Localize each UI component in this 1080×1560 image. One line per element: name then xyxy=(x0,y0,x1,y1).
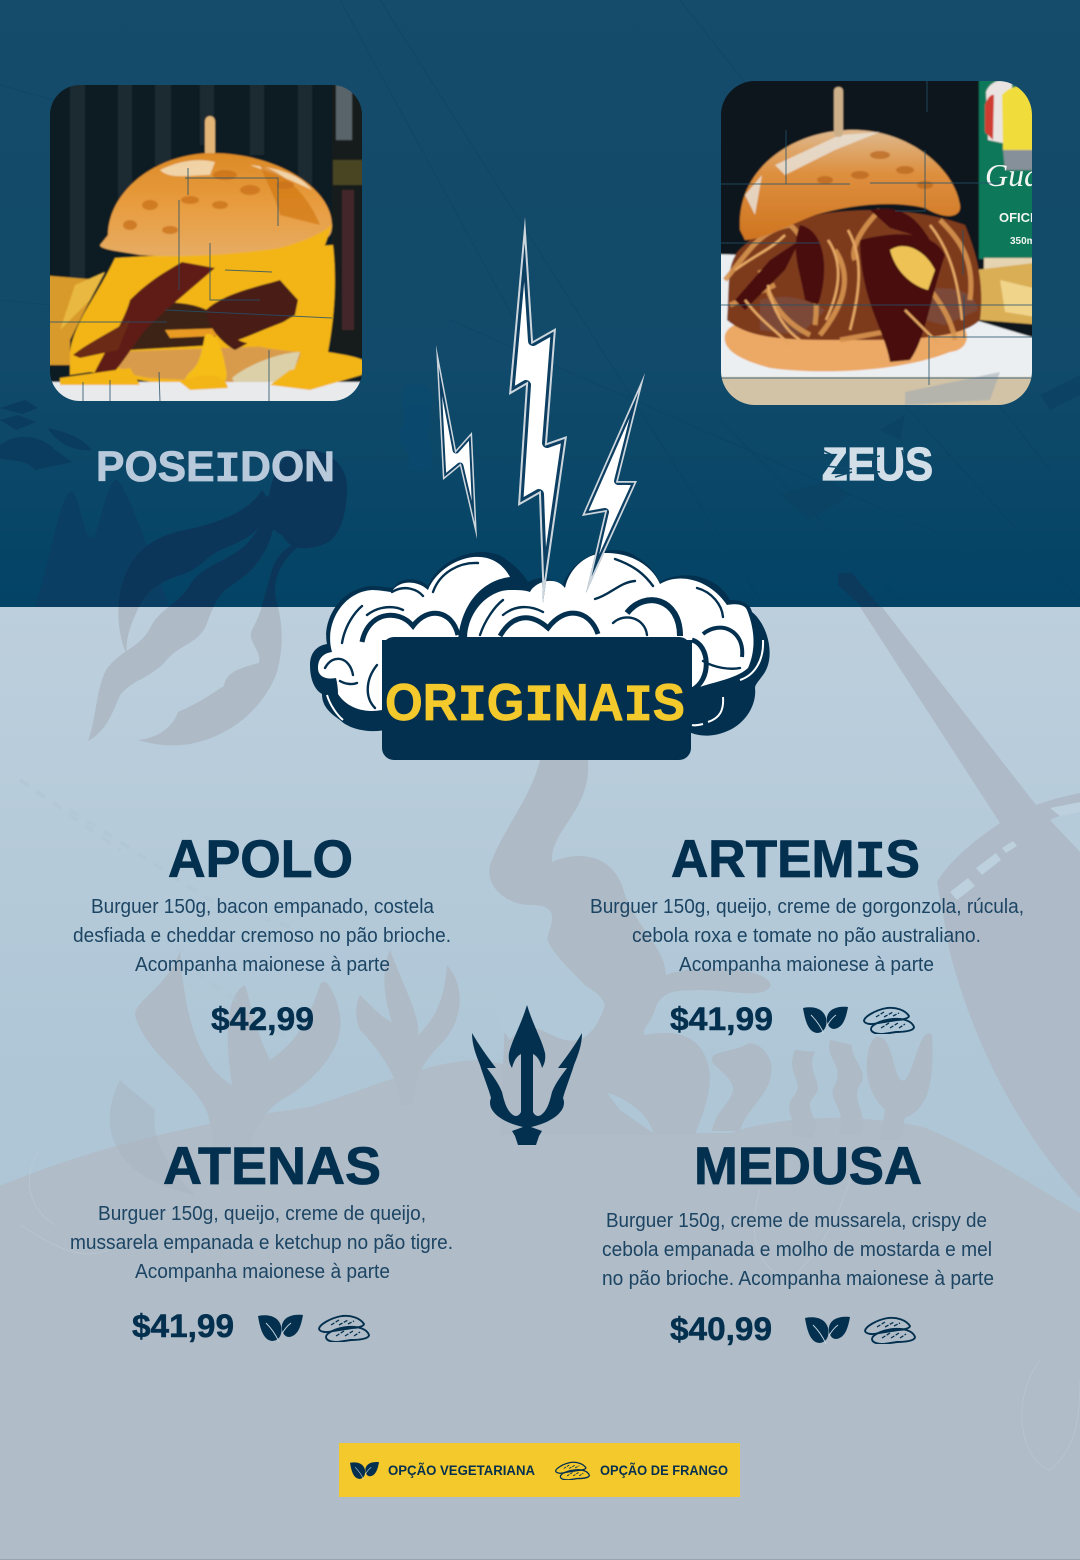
item: Medusa: cebola empanada e molho de mostarda e mel xyxy=(602,1239,992,1261)
cloud outline xyxy=(310,550,770,736)
cloud inner strokes xyxy=(362,613,458,642)
banner: Originais xyxy=(382,637,691,760)
item: Atenas: ATENAS xyxy=(163,1137,381,1196)
label: Zeus: ZEUS xyxy=(822,438,933,490)
icon: chicken legend xyxy=(556,1462,589,1480)
photo: Poseidon burger xyxy=(50,85,362,401)
item: Artemis xyxy=(590,830,1024,1037)
legend: OPÇÃO DE FRANGO xyxy=(600,1463,728,1478)
item: Apolo: APOLO xyxy=(168,830,353,889)
bolt: left xyxy=(436,345,477,539)
item: Medusa: $40,99 xyxy=(670,1311,772,1347)
bottle label: 350m xyxy=(1010,236,1036,247)
banner: Originais: ORIGINAIS xyxy=(385,674,685,736)
legend xyxy=(339,1443,740,1497)
bottle label: Guar xyxy=(985,157,1053,193)
item: Medusa: no pão brioche. Acompanha maionese à parte xyxy=(602,1268,994,1290)
item: Artemis: $41,99 xyxy=(670,1001,773,1037)
legend: OPÇÃO VEGETARIANA xyxy=(388,1463,535,1478)
item: Atenas xyxy=(70,1137,453,1344)
lightning bolts xyxy=(436,217,645,603)
background: jellyfish silhouette xyxy=(88,449,347,745)
item: Atenas: $41,99 xyxy=(132,1308,234,1344)
bottle label xyxy=(986,165,1032,244)
item: Medusa: Burguer 150g, creme de mussarela, crispy de xyxy=(606,1210,987,1232)
item: Apolo: Acompanha maionese à parte xyxy=(135,954,390,976)
icon: leaf xyxy=(805,1317,850,1344)
icon: chicken xyxy=(865,1318,915,1344)
item: Artemis: cebola roxa e tomate no pão australiano. xyxy=(632,925,981,947)
item: Artemis: ARTEMIS xyxy=(671,830,920,893)
item: Apolo: Burguer 150g, bacon empanado, costela xyxy=(91,896,435,918)
item: Medusa: MEDUSA xyxy=(694,1137,922,1196)
icon: chicken xyxy=(864,1008,914,1034)
item: Atenas: mussarela empanada e ketchup no pão tigre. xyxy=(70,1232,453,1254)
background: top band xyxy=(0,0,1080,607)
icon: trident xyxy=(472,1005,582,1145)
item: Artemis: Acompanha maionese à parte xyxy=(679,954,934,976)
bolt: centre xyxy=(509,217,567,603)
photo: Zeus burger xyxy=(721,81,1032,405)
cloud xyxy=(310,550,770,736)
item: Artemis: Burguer 150g, queijo, creme de gorgonzola, rúcula, xyxy=(590,896,1024,918)
icon: leaf xyxy=(258,1315,303,1342)
item: Apolo: $42,99 xyxy=(211,1001,314,1037)
icon: leaf xyxy=(803,1007,848,1034)
label: Poseidon: POSEIDON xyxy=(96,443,335,494)
bottle label: OFICI xyxy=(999,210,1034,225)
item: Atenas: Burguer 150g, queijo, creme de queijo, xyxy=(98,1203,426,1225)
background: lower panel xyxy=(0,607,1080,1560)
item: Apolo xyxy=(73,830,451,1037)
item: Medusa xyxy=(602,1137,994,1347)
cloud white centre and right xyxy=(467,553,754,690)
item: Atenas: Acompanha maionese à parte xyxy=(135,1261,390,1283)
icon: leaf legend xyxy=(350,1462,379,1480)
bolt: right xyxy=(582,373,645,593)
item: Apolo: desfiada e cheddar cremoso no pão brioche. xyxy=(73,925,451,947)
cloud white left xyxy=(318,557,510,711)
icon: chicken xyxy=(319,1316,369,1342)
